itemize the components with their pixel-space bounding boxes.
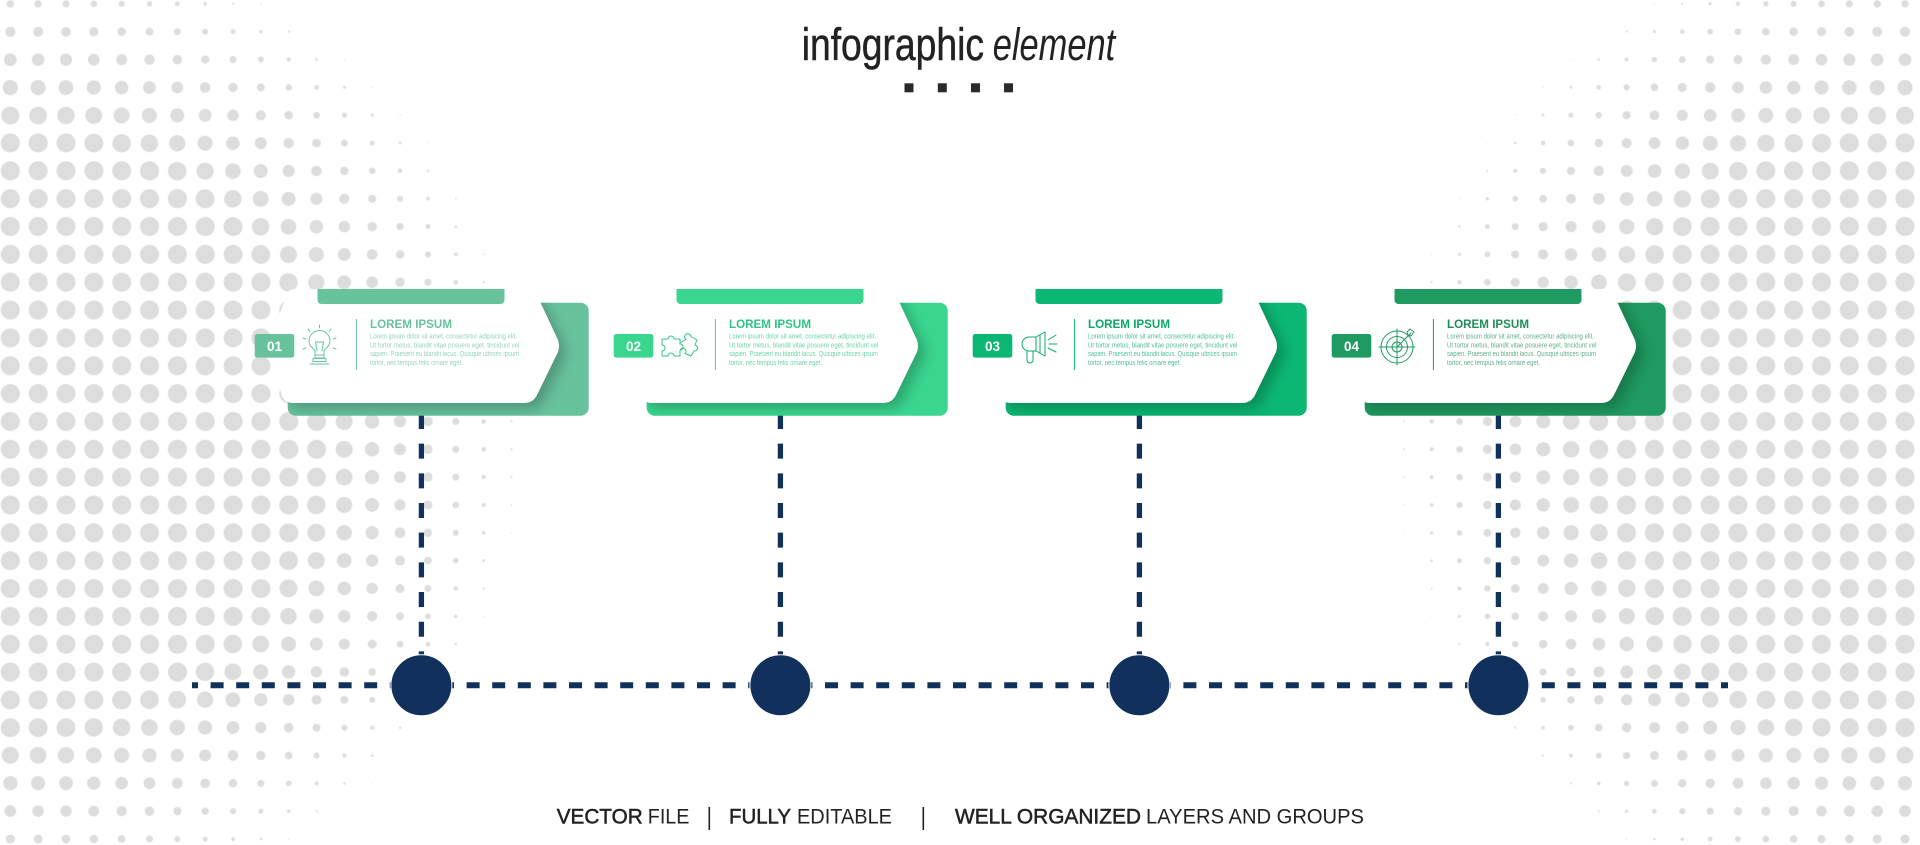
- connector: step 2: [778, 414, 783, 660]
- timeline dashed line: [192, 682, 1728, 688]
- text block 01: tortor, nec tempus felis ornare eget.: [370, 360, 463, 367]
- number badge 04: 04: [1344, 339, 1359, 354]
- text block 03: [1088, 319, 1238, 367]
- footer text: VECTOR: [557, 806, 643, 828]
- panel: step 04: [1332, 289, 1666, 416]
- panel: step 03: [973, 289, 1307, 416]
- number badge 02: 02: [626, 339, 641, 354]
- text block 02: Lorem ipsum dolor sit amet, consectetur adipiscing elit.: [729, 334, 876, 340]
- footer text: FULLY: [729, 806, 791, 828]
- number badge 03: [973, 334, 1012, 358]
- title: element: [993, 19, 1117, 70]
- node: step 2: [750, 655, 811, 716]
- node: step 3: [1109, 655, 1170, 716]
- text block 04: Lorem ipsum dolor sit amet, consectetur adipiscing elit.: [1447, 334, 1594, 340]
- footer text: WELL ORGANIZED: [955, 806, 1141, 828]
- text block 04: LOREM IPSUM: [1447, 319, 1529, 331]
- text block 01: sapien. Praesent eu blandit lacus. Quisque ultrices ipsum: [370, 351, 519, 358]
- panel: step 01: [255, 289, 589, 416]
- text block 03: Ut tortor metus, blandit vitae posuere eget, tincidunt vel: [1088, 342, 1238, 349]
- text block 01: Lorem ipsum dolor sit amet, consectetur adipiscing elit.: [370, 334, 517, 340]
- text block 01: Ut tortor metus, blandit vitae posuere eget, tincidunt vel: [370, 342, 520, 349]
- icon: puzzle: [662, 334, 698, 356]
- connector: step 3: [1137, 414, 1142, 660]
- text block 01: [370, 319, 520, 367]
- text block 03: Lorem ipsum dolor sit amet, consectetur adipiscing elit.: [1088, 334, 1235, 340]
- number badge 01: [255, 334, 294, 358]
- text block 02: Ut tortor metus, blandit vitae posuere eget, tincidunt vel: [729, 342, 879, 349]
- text block 03: tortor, nec tempus felis ornare eget.: [1088, 360, 1181, 367]
- connector: step 4: [1496, 414, 1501, 660]
- text block 02: [729, 319, 879, 367]
- node: step 4: [1468, 655, 1529, 716]
- text block 04: [1447, 319, 1597, 367]
- text block 04: tortor, nec tempus felis ornare eget.: [1447, 360, 1540, 367]
- text block 04: sapien. Praesent eu blandit lacus. Quisque ultrices ipsum: [1447, 351, 1596, 358]
- panel: step 02: [614, 289, 948, 416]
- icon: light bulb: [303, 325, 336, 364]
- node: step 1: [391, 655, 452, 716]
- icon: megaphone: [1022, 332, 1057, 363]
- footer text: EDITABLE: [797, 806, 892, 828]
- title: [802, 19, 1117, 70]
- text block 03: LOREM IPSUM: [1088, 319, 1170, 331]
- title dots: [904, 83, 1013, 92]
- number badge 01: 01: [267, 339, 282, 354]
- text block 02: LOREM IPSUM: [729, 319, 811, 331]
- number badge 04: [1332, 334, 1371, 358]
- text block 02: tortor, nec tempus felis ornare eget.: [729, 360, 822, 367]
- text block 03: sapien. Praesent eu blandit lacus. Quisque ultrices ipsum: [1088, 351, 1237, 358]
- number badge 02: [614, 334, 653, 358]
- footer text: [557, 806, 1364, 830]
- icon: target: [1379, 329, 1415, 365]
- connector: step 1: [419, 414, 424, 660]
- text block 04: Ut tortor metus, blandit vitae posuere eget, tincidunt vel: [1447, 342, 1597, 349]
- text block 02: sapien. Praesent eu blandit lacus. Quisque ultrices ipsum: [729, 351, 878, 358]
- number badge 03: 03: [985, 339, 1000, 354]
- title: infographic: [802, 19, 984, 70]
- text block 01: LOREM IPSUM: [370, 319, 452, 331]
- footer text: FILE: [648, 806, 689, 828]
- footer text: LAYERS AND GROUPS: [1146, 806, 1364, 828]
